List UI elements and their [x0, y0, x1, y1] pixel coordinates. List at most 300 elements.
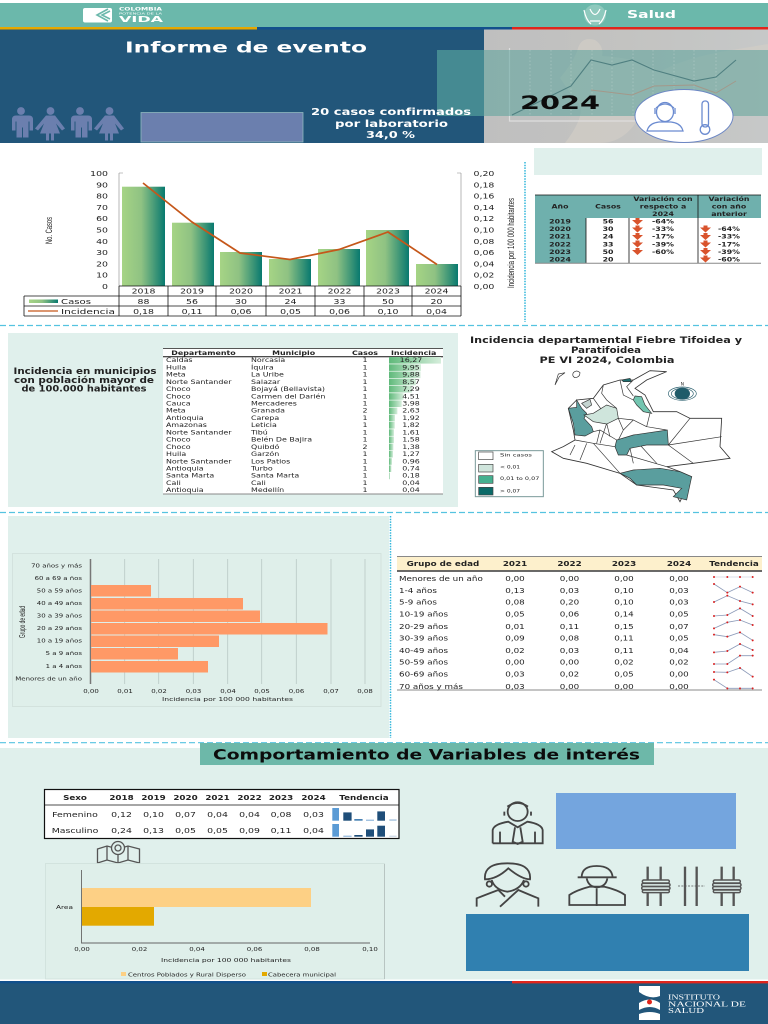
age group table: 0,02 [560, 671, 579, 678]
sex table: Masculino [52, 826, 98, 835]
x axis labels: 0,07 [323, 689, 339, 695]
variation table: 33 [603, 241, 614, 248]
age group table: 0,06 [560, 611, 579, 618]
right axis labels: 0,04 [474, 260, 494, 268]
left axis labels: 20 [96, 260, 108, 268]
municipal table: Íquira [251, 363, 274, 371]
variation table: -39% [652, 241, 674, 248]
municipal table: 2 [362, 407, 368, 414]
age group table: 0,05 [669, 635, 689, 642]
municipal table: Caldas [166, 356, 193, 364]
sex table: 0,04 [207, 810, 228, 819]
variation table: -64% [652, 219, 674, 225]
logo: Colombia potencia de la vida: VIDA [119, 15, 165, 24]
map legend: Sin casos [500, 453, 533, 459]
municipal table: Norte Santander [166, 457, 232, 465]
right axis labels: 0,12 [474, 215, 494, 223]
right axis labels: 0,20 [474, 169, 494, 178]
institute name [668, 994, 746, 1015]
map legend: > 0,07 [500, 488, 520, 494]
data table: 56 [186, 297, 198, 305]
age group table: 0,02 [505, 647, 525, 655]
department borders [570, 380, 722, 473]
municipal table: Cali [251, 479, 266, 487]
sex table: 0,03 [303, 810, 324, 819]
icon: woman [477, 863, 538, 907]
variation table: respecto a [640, 203, 687, 210]
sex table: 0,08 [271, 810, 291, 819]
variation table: -33% [652, 226, 674, 233]
sex table: 0,10 [143, 810, 164, 819]
municipal table: 2 [362, 443, 368, 451]
sparkbars: trend by sex [332, 808, 397, 837]
area chart: 0,00 [74, 947, 90, 953]
confirmed cases text: 34,0 % [366, 130, 416, 141]
variation table: -33% [718, 234, 740, 240]
municipal table: La Uribe [251, 371, 284, 378]
variation table: 2024 [549, 256, 571, 263]
age group table: 2021 [503, 560, 527, 568]
map legend: < 0,01 [500, 464, 520, 470]
logo: Colombia potencia de la vida: COLOMBIA [119, 6, 164, 12]
panel: age group chart [8, 516, 389, 738]
icon: map pin [98, 842, 140, 863]
heading [200, 743, 654, 765]
bars: incidence by age [91, 585, 328, 672]
axes [119, 173, 461, 286]
left axis labels: 0 [102, 282, 108, 291]
data table: 0,06 [231, 307, 251, 316]
data table: 2021 [279, 287, 302, 295]
municipal table: 1 [362, 378, 368, 386]
municipal table: Choco [166, 392, 191, 400]
right axis labels: 0,00 [474, 282, 494, 291]
variation table: -60% [652, 249, 674, 255]
variation table: Variación con [633, 196, 693, 203]
age group table: 0,20 [560, 599, 579, 606]
right axis labels: 0,14 [474, 203, 494, 212]
hero banner [0, 30, 768, 143]
age labels: 1 a 4 años [46, 663, 82, 670]
data table: 20 [431, 297, 442, 305]
sex table: 0,12 [111, 810, 132, 819]
age group table: 0,11 [614, 647, 634, 655]
x axis labels: 0,02 [151, 689, 167, 695]
sex table: 0,24 [111, 826, 132, 835]
x axis labels: 0,04 [220, 689, 236, 695]
municipal table: 1 [362, 363, 368, 371]
data table: 24 [285, 297, 296, 305]
confirmed cases text: por laboratorio [335, 119, 449, 130]
age group table: Tendencia [709, 560, 759, 568]
heading: municipal incidence [14, 367, 156, 394]
municipal table: 8,57 [402, 378, 420, 386]
age group table: 0,00 [669, 671, 689, 678]
age group table: 0,00 [669, 683, 689, 691]
municipal table: Choco [166, 385, 191, 393]
bars: cases per year [122, 187, 458, 286]
municipal table: 1 [362, 472, 368, 479]
sex table: 0,09 [239, 826, 260, 835]
data table: Casos [61, 298, 92, 306]
sex table [44, 790, 399, 838]
age group table: 0,10 [614, 587, 634, 595]
map title: PE VI 2024, Colombia [540, 356, 675, 366]
confirmed cases text: 20 casos confirmados [311, 107, 471, 118]
data table [24, 286, 461, 316]
age group table: 0,03 [560, 587, 579, 595]
icons: down arrows [632, 218, 711, 262]
map title [470, 336, 742, 366]
chart legend [121, 972, 336, 978]
age group table: 0,00 [560, 575, 579, 583]
municipal table: 1,61 [402, 428, 420, 436]
empty box [141, 112, 303, 142]
municipal table: 1 [362, 371, 368, 378]
area chart: 0,06 [247, 947, 262, 953]
data table: 0,04 [426, 307, 447, 316]
age group table: 0,00 [560, 659, 579, 666]
data table: 2022 [328, 287, 351, 295]
grid lines [125, 559, 365, 684]
logo: INS [639, 986, 660, 1020]
box: blue [466, 914, 749, 971]
municipal table: Casos [352, 349, 378, 357]
municipal table: 1,92 [402, 414, 420, 422]
municipal table: 1 [362, 479, 368, 487]
chart legend: Centros Poblados y Rural Disperso [128, 972, 246, 978]
variation table: 2020 [549, 226, 571, 233]
municipal table: 1,27 [402, 450, 420, 458]
sex table: 0,13 [143, 826, 164, 835]
sex table: Sexo [63, 794, 88, 802]
age labels: 70 años y más [31, 562, 82, 569]
age group table: 0,14 [614, 611, 634, 618]
variation table: 20 [603, 256, 614, 263]
data table: 0,10 [378, 307, 398, 316]
variation table: 2022 [549, 241, 571, 248]
data table: 33 [334, 297, 345, 305]
title: Informe de evento [125, 38, 367, 56]
left axis labels: 70 [96, 203, 108, 212]
age group table: Menores de un año [399, 575, 483, 583]
icon: patient with thermometer [635, 90, 733, 142]
age group table: 0,03 [505, 671, 525, 678]
age group table: 2024 [667, 560, 692, 568]
age group table: 0,03 [505, 683, 525, 691]
icon: prison bars [642, 867, 741, 906]
age group table: Grupo de edad [407, 560, 479, 568]
area chart: 0,02 [132, 947, 147, 953]
age group table: 20-29 años [399, 623, 448, 631]
municipal table: Amazonas [166, 421, 207, 429]
compass [668, 381, 696, 400]
age group table: 40-49 años [399, 647, 448, 655]
area chart: Area [56, 905, 73, 911]
age labels: 20 a 29 años [37, 626, 82, 632]
age group table: 0,08 [560, 635, 579, 642]
chart legend: Cabecera municipal [268, 972, 336, 978]
variation table: 2023 [549, 249, 571, 255]
left axis title: No. Casos [44, 217, 54, 244]
left axis labels: 90 [96, 181, 108, 189]
municipal table: Santa Marta [251, 472, 299, 479]
municipal table: 1 [362, 392, 368, 400]
left axis labels: 50 [96, 226, 108, 234]
municipal table: Norcasia [251, 356, 285, 364]
data table: 0,06 [329, 307, 350, 316]
area chart: Incidencia por 100 000 habitantes [161, 958, 291, 964]
municipal table: 4,51 [402, 392, 420, 400]
municipal table: Incidencia [391, 349, 437, 357]
age group table: 2022 [557, 560, 582, 568]
islands [555, 371, 580, 385]
variation table: 56 [603, 219, 614, 225]
compass: N [681, 381, 685, 387]
heading: municipal incidence: de 100.000 habitantes [22, 384, 146, 394]
left axis labels [90, 169, 108, 291]
age group table: 1-4 años [399, 587, 437, 595]
data table: 30 [235, 297, 247, 305]
age group table: 70 años y más [399, 683, 463, 691]
sex table: 2020 [173, 794, 198, 802]
sex table: 0,04 [239, 810, 260, 819]
municipal table: Garzón [251, 450, 279, 458]
left axis labels: 100 [90, 169, 108, 178]
bars: area [82, 888, 311, 907]
heading: Comportamiento de Variables de interés [213, 748, 640, 764]
panel: variation box [534, 148, 762, 175]
data table: 2024 [425, 287, 448, 295]
photo: hand drawing chart [510, 39, 768, 143]
footer [0, 981, 768, 1024]
data table: 2019 [180, 287, 204, 295]
age group table: 0,13 [505, 587, 525, 595]
variation table: 2019 [549, 219, 571, 225]
age group table: 0,03 [669, 599, 689, 606]
right axis labels: 0,18 [474, 181, 494, 189]
panel: municipal incidence [8, 333, 458, 507]
age group table: 0,00 [669, 575, 689, 583]
age group table: 0,05 [505, 611, 525, 618]
municipal table: Cali [166, 479, 181, 487]
map title: Paratifoidea [571, 346, 641, 356]
municipal table: Antioquia [166, 465, 204, 472]
municipal table: 0,04 [402, 486, 420, 494]
departments with cases [568, 378, 692, 500]
x axis labels: 0,08 [357, 689, 373, 695]
confirmed cases text [311, 107, 471, 141]
data table: 50 [382, 297, 394, 305]
sex table: 2019 [141, 794, 166, 802]
right axis labels [474, 169, 494, 291]
data table: 2023 [376, 287, 400, 295]
heading: municipal incidence: Incidencia en municipios [14, 367, 156, 377]
municipal table: 1 [362, 428, 368, 436]
sex table: 0,11 [271, 826, 291, 835]
area chart: 0,04 [189, 947, 205, 953]
sex table: 2023 [269, 794, 293, 802]
age group table: 0,11 [560, 623, 579, 631]
map of Colombia [475, 371, 730, 502]
municipal table: Municipio [272, 349, 315, 357]
municipal table: 9,95 [402, 363, 420, 371]
municipal table: 0,96 [402, 457, 420, 465]
municipal table: Choco [166, 443, 191, 451]
sex table: 0,04 [303, 826, 324, 835]
age group table: 0,11 [614, 635, 634, 642]
municipal table: Norte Santander [166, 428, 232, 436]
sex table: 2024 [301, 794, 326, 802]
sex table: 2021 [205, 794, 230, 802]
variation table: -60% [718, 256, 740, 263]
municipal table: 0,04 [402, 479, 420, 487]
age labels [15, 562, 82, 682]
x axis labels: 0,00 [83, 689, 99, 695]
municipal table: 1 [362, 356, 368, 364]
municipal table: Meta [166, 407, 186, 414]
municipal table: Huila [166, 450, 186, 458]
municipal table: Turbo [250, 465, 273, 472]
variation table: 2024 [652, 211, 674, 218]
sex table: 2022 [237, 794, 262, 802]
age labels: 40 a 49 años [37, 601, 82, 607]
municipal table: Antioquia [166, 414, 204, 422]
variation table: -64% [718, 226, 740, 233]
right axis title: Incidencia por 100 000 habitantes [506, 198, 516, 288]
municipal table: Granada [251, 407, 285, 414]
age group table: 0,09 [505, 635, 525, 642]
panel: cases and incidence chart [24, 169, 516, 316]
variation table: anterior [711, 211, 748, 218]
heading: municipal incidence: con población mayor de [14, 375, 154, 386]
age labels: 30 a 39 años [37, 613, 82, 619]
icon: people [12, 107, 124, 140]
sex table: Femenino [52, 810, 98, 819]
area chart: 0,10 [362, 947, 378, 953]
logo: Salud [584, 4, 676, 26]
x axis title: Incidencia por 100 000 habitantes [162, 697, 293, 703]
municipal table: Antioquia [166, 486, 204, 494]
municipal table: 1 [362, 400, 368, 407]
map title: Incidencia departamental Fiebre Tifoidea y [470, 336, 742, 346]
map legend: 0,01 to 0,07 [500, 476, 539, 482]
area chart [46, 864, 384, 979]
logo: Colombia potencia de la vida [83, 6, 165, 24]
sex table: 0,07 [175, 810, 196, 819]
x axis labels: 0,06 [289, 689, 304, 695]
municipal table: 7,29 [402, 385, 420, 393]
right axis labels: 0,10 [474, 226, 494, 234]
data table: 0,05 [280, 307, 301, 316]
municipal table: 1 [362, 385, 368, 393]
right axis labels: 0,02 [474, 271, 494, 279]
variation table: -39% [718, 249, 740, 255]
x axis labels [83, 689, 373, 695]
municipal table: Quibdó [251, 443, 279, 451]
age group table: 2023 [612, 560, 636, 568]
municipal table: 2,63 [402, 407, 420, 414]
right axis labels: 0,08 [474, 237, 494, 245]
municipal table: 1 [362, 457, 368, 465]
age labels: 10 a 19 años [37, 638, 82, 644]
institute name: NACIONAL DE [668, 1000, 746, 1008]
data table: 0,11 [182, 307, 202, 316]
municipal table: Cauca [166, 400, 191, 407]
variation table: Casos [595, 203, 621, 210]
municipal table: 0,74 [402, 465, 420, 472]
municipal table: Medellín [251, 486, 284, 494]
age labels: Menores de un año [15, 676, 82, 682]
institute name: INSTITUTO [668, 994, 720, 1002]
data table: 2020 [229, 287, 253, 295]
municipal table: 1 [362, 450, 368, 458]
municipal table: Carmen del Darién [251, 392, 325, 400]
left axis labels: 60 [96, 215, 108, 223]
variation table: Año [552, 203, 569, 210]
sex table: 2018 [109, 794, 134, 802]
right axis labels: 0,06 [474, 249, 494, 257]
data table: 2018 [132, 287, 155, 295]
left axis labels: 10 [96, 271, 108, 279]
variation table: 2021 [549, 234, 571, 240]
municipal table: 1,58 [402, 436, 420, 443]
age group table: 5-9 años [399, 599, 437, 606]
age group table: 0,03 [560, 647, 579, 655]
logo: Colombia potencia de la vida: POTENCIA DE LA [119, 12, 164, 16]
municipal table: 1 [362, 414, 368, 422]
age group table [397, 556, 762, 691]
age group table: 0,00 [505, 659, 525, 666]
age labels: 60 a 69 a ños [35, 576, 82, 582]
age group table: 0,15 [614, 623, 634, 631]
age group table: 60-69 años [399, 671, 448, 678]
municipal table: Carepa [251, 414, 279, 422]
sex table: Tendencia [339, 794, 389, 802]
municipal table: Tibú [250, 428, 268, 436]
icon: soldier [569, 866, 625, 906]
age group table: 0,08 [505, 599, 525, 606]
municipal table: Departamento [171, 349, 236, 357]
age group table: 0,10 [614, 599, 634, 606]
left axis labels: 40 [96, 237, 108, 245]
municipal table: 1 [362, 486, 368, 494]
logo: Salud: Salud [627, 9, 676, 21]
age labels: 5 a 9 años [46, 651, 82, 657]
variation table: con año [712, 203, 747, 210]
municipal table: 1 [362, 421, 368, 429]
municipal table: 16,27 [400, 356, 422, 364]
age group table: 0,07 [669, 623, 689, 631]
age group table: 0,00 [505, 575, 525, 583]
age group table: 0,02 [669, 659, 689, 666]
age group table: 0,00 [614, 683, 634, 691]
municipal table: Huila [166, 363, 186, 371]
municipal table: Belén De Bajira [251, 436, 312, 443]
age group table: 10-19 años [399, 611, 448, 618]
age group table: 0,01 [505, 623, 525, 631]
age group table: 0,05 [669, 611, 689, 618]
area chart: 0,08 [304, 947, 320, 953]
data table: 88 [138, 297, 149, 305]
municipal table: Norte Santander [166, 378, 232, 386]
variation table: 30 [603, 226, 614, 233]
municipal table: 9,88 [402, 371, 420, 378]
institute name: SALUD [668, 1007, 704, 1015]
municipal table: 3,98 [402, 400, 420, 407]
data table: 0,18 [133, 307, 154, 316]
variation table: 50 [603, 249, 614, 255]
